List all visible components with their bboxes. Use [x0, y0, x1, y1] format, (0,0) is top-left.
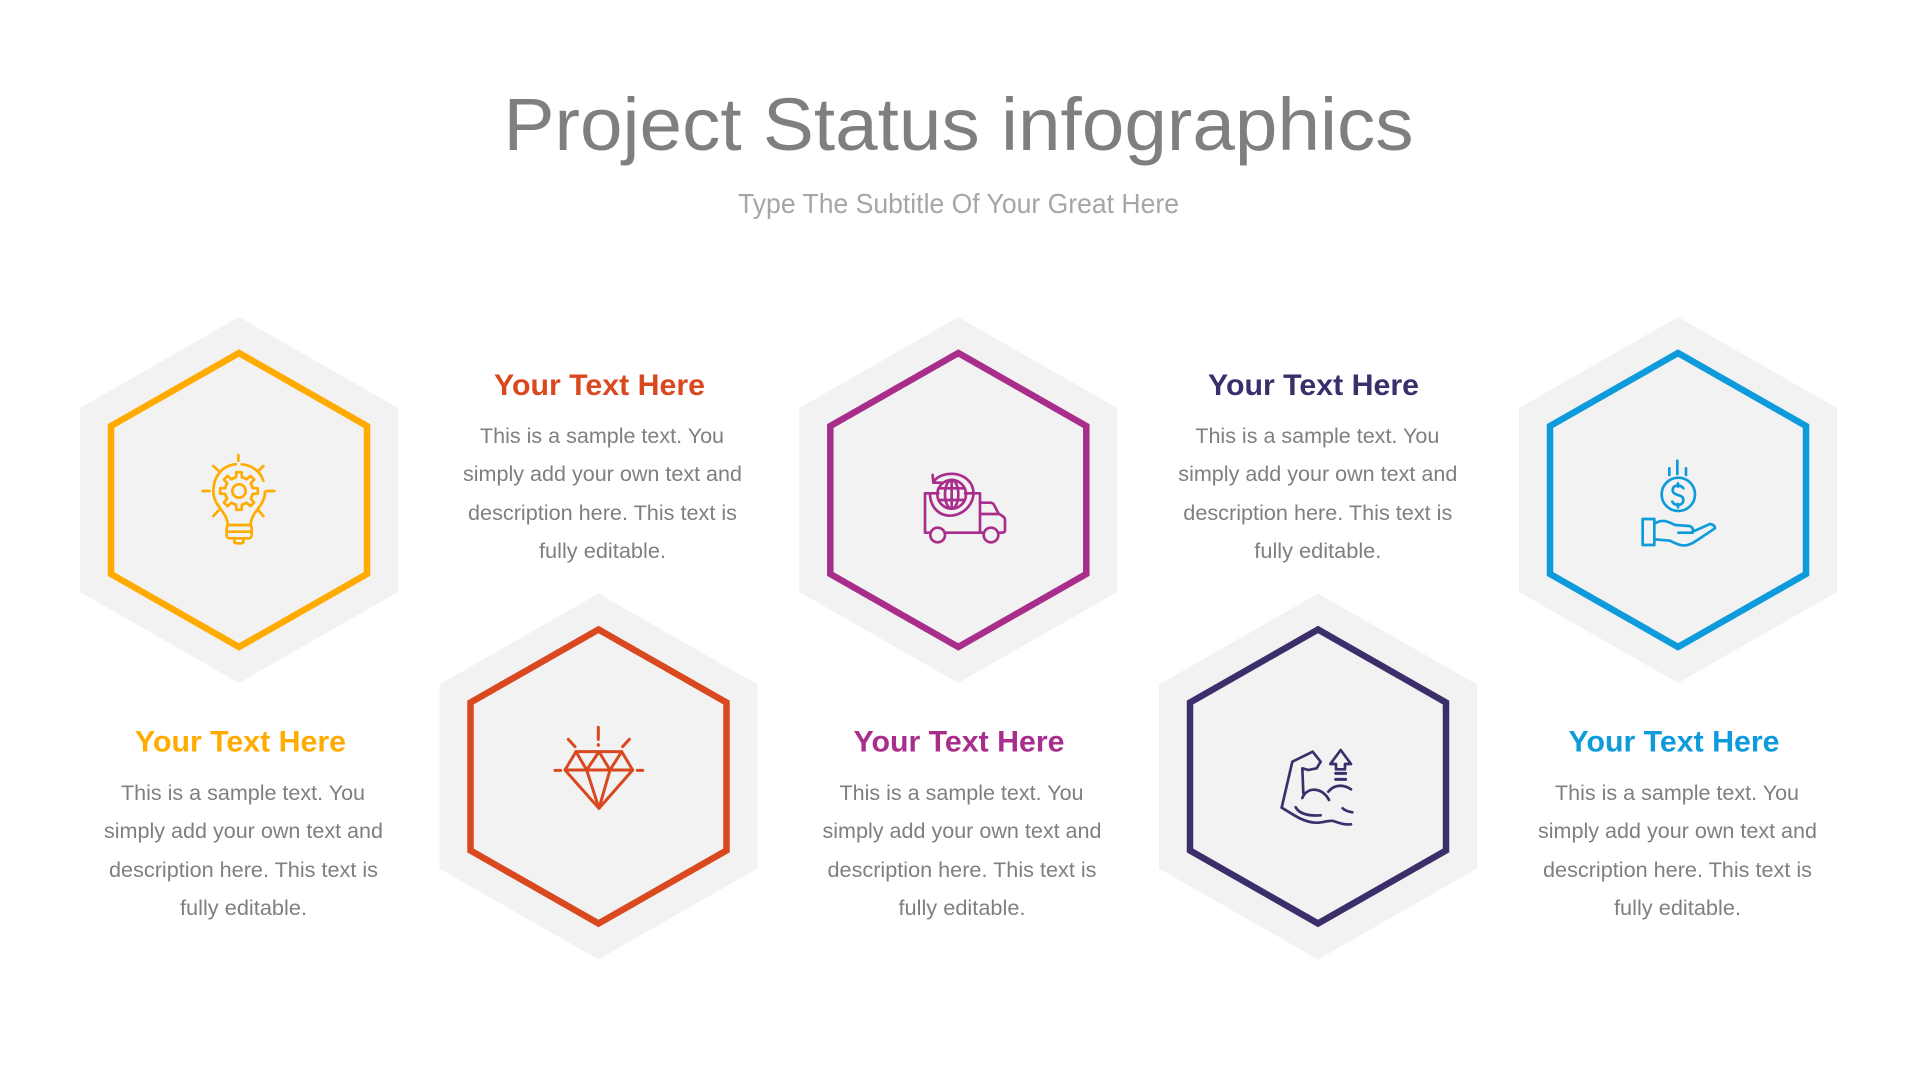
text block: blue: This is a sample text. You	[1555, 781, 1799, 805]
text block: red: Your Text Here	[494, 369, 705, 402]
text block: magenta: description here. This text is	[828, 858, 1096, 882]
hexagon 1: yellow	[80, 317, 398, 683]
text block: red: This is a sample text. You	[480, 424, 724, 448]
text block: magenta: Your Text Here	[854, 726, 1064, 758]
icon: delivery truck with globe	[925, 474, 1005, 542]
text block: blue: description here. This text is	[1543, 858, 1812, 882]
text block: purple: Your Text Here	[1208, 369, 1419, 402]
text block: blue: fully editable.	[1614, 896, 1741, 920]
text block: magenta: This is a sample text. You	[840, 781, 1084, 805]
text block: red	[463, 369, 742, 563]
icon: hand holding dollar coin	[1643, 461, 1715, 545]
text block: blue	[1538, 726, 1817, 920]
subtitle: Type The Subtitle Of Your Great Here	[738, 188, 1179, 219]
text block: magenta: fully editable.	[898, 896, 1026, 920]
text block: yellow: fully editable.	[180, 896, 307, 920]
text block: purple: This is a sample text. You	[1195, 424, 1439, 448]
title: Project Status infographics	[504, 83, 1414, 166]
text block: red: fully editable.	[539, 539, 666, 563]
icon: flexed arm with up arrow	[1282, 750, 1352, 824]
text block: yellow	[104, 726, 383, 920]
text block: magenta: simply add your own text and	[822, 819, 1102, 843]
text block: red: simply add your own text and	[463, 462, 742, 486]
hexagon 3: magenta	[799, 317, 1117, 683]
text block: magenta	[822, 726, 1102, 920]
hexagon 4: purple	[1159, 594, 1477, 960]
text block: purple: description here. This text is	[1183, 501, 1452, 525]
text block: purple	[1178, 369, 1457, 563]
text block: red: description here. This text is	[468, 501, 737, 525]
text block: blue: Your Text Here	[1568, 726, 1780, 758]
text block: blue: simply add your own text and	[1538, 819, 1817, 843]
hexagon 5: blue	[1519, 317, 1837, 683]
text block: yellow: Your Text Here	[135, 726, 346, 758]
text block: purple: simply add your own text and	[1178, 462, 1457, 486]
text block: yellow: This is a sample text. You	[121, 781, 365, 805]
icon: diamond	[555, 727, 643, 808]
hexagon 2: red	[440, 594, 758, 960]
text block: yellow: simply add your own text and	[104, 819, 383, 843]
text block: yellow: description here. This text is	[109, 858, 378, 882]
icon: light bulb with gear	[203, 455, 274, 543]
text block: purple: fully editable.	[1254, 539, 1381, 563]
